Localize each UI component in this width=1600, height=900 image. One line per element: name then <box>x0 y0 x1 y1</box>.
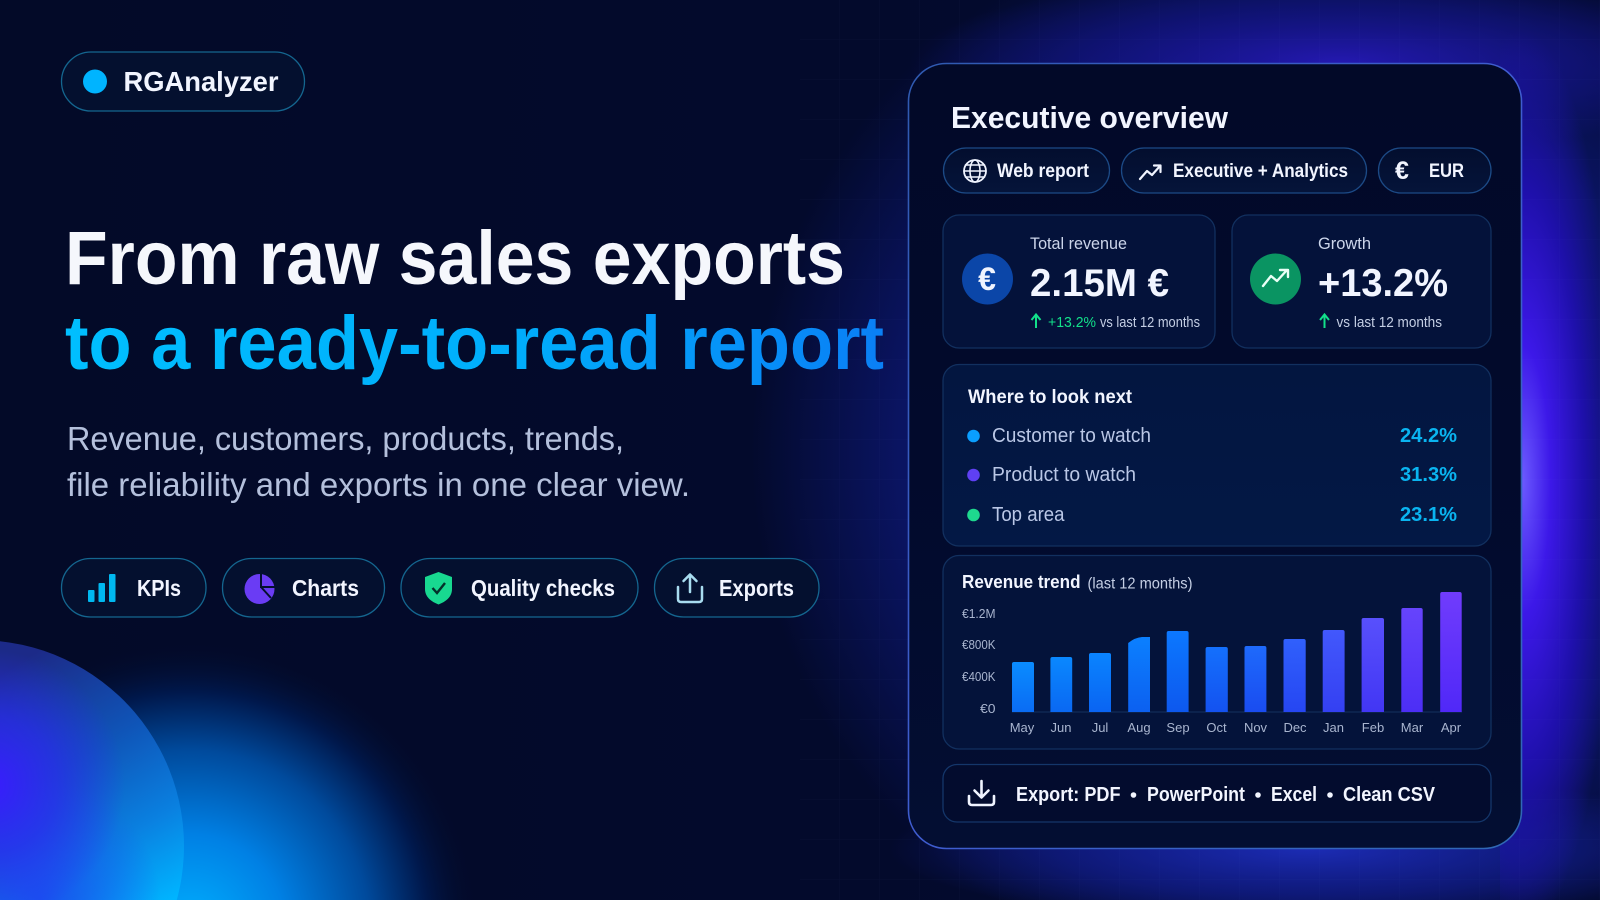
chart: month labels: Mar <box>1401 720 1424 735</box>
chart: y axis labels: €0 <box>980 701 996 716</box>
chart: month labels: Dec <box>1283 720 1307 735</box>
headline: From raw sales exports <box>65 216 845 301</box>
headline <box>65 216 884 386</box>
chart: y axis labels <box>962 606 996 716</box>
row: top area: Top area <box>992 504 1065 526</box>
panel title: Executive overview <box>951 100 1229 135</box>
chart: y axis labels: €1.2M <box>962 606 996 621</box>
chip: Web report: Web report <box>997 160 1089 182</box>
icon: euro <box>962 254 1013 304</box>
bar: export formats <box>943 764 1491 822</box>
bar: export formats: Clean CSV <box>1343 784 1436 806</box>
card: growth: Growth <box>1318 235 1371 253</box>
chip: KPIs <box>62 558 206 617</box>
chip: Executive + Analytics <box>1122 148 1366 193</box>
icon: download <box>969 781 994 805</box>
card: total revenue: vs last 12 months <box>1100 315 1200 331</box>
chip: EUR: € <box>1395 157 1409 185</box>
card: total revenue: Total revenue <box>1030 235 1127 253</box>
row: customer to watch: 24.2% <box>1400 425 1457 447</box>
chart: y axis labels: €800K <box>962 637 996 652</box>
headline: to a ready-to-read report <box>65 301 884 386</box>
bar: export formats: Export: PDF <box>1016 784 1120 806</box>
chart: month labels: Oct <box>1206 720 1227 735</box>
icon: growth arrow <box>1250 254 1301 304</box>
card: growth: vs last 12 months <box>1336 315 1442 331</box>
subheading: Revenue, customers, products, trends, <box>67 420 624 457</box>
chart: month labels: Jul <box>1092 720 1108 735</box>
chart: y axis labels: €400K <box>962 669 996 684</box>
chip: Web report <box>944 148 1110 193</box>
chip: EUR <box>1378 148 1491 193</box>
brand pill <box>62 52 304 111</box>
card: revenue trend <box>943 556 1491 749</box>
bar: export formats: PowerPoint <box>1147 784 1245 806</box>
row: product to watch <box>967 464 1457 486</box>
chip: Exports <box>654 558 819 617</box>
subheading: file reliability and exports in one clear view. <box>67 466 690 503</box>
chip: Charts <box>222 558 384 617</box>
chart: month labels: Apr <box>1441 720 1462 735</box>
chart: monthly bars <box>1012 592 1462 712</box>
chip: EUR: EUR <box>1429 160 1464 182</box>
chart: month labels: Jun <box>1051 720 1071 735</box>
chip: Quality checks: Quality checks <box>471 575 615 601</box>
decorative corner orb <box>0 640 480 900</box>
card: total revenue <box>943 215 1215 348</box>
card: revenue trend: (last 12 months) <box>1088 576 1192 592</box>
chip: Charts: Charts <box>292 575 359 601</box>
icon: euro: € <box>978 261 996 297</box>
chip: Quality checks <box>401 558 638 617</box>
chip: KPIs: KPIs <box>137 575 181 601</box>
card: growth <box>1232 215 1491 348</box>
background glow behind panel <box>740 0 1600 900</box>
chip: Executive + Analytics: Executive + Analytics <box>1173 160 1348 182</box>
feature chips <box>62 558 819 617</box>
panel: executive overview <box>908 64 1522 848</box>
row: product to watch: 31.3% <box>1400 464 1457 486</box>
row: top area <box>967 504 1457 526</box>
row: customer to watch: Customer to watch <box>992 425 1151 447</box>
card: growth: +13.2% <box>1318 262 1448 305</box>
chart: month labels: Sep <box>1166 720 1190 735</box>
card: revenue trend: Revenue trend <box>962 571 1080 592</box>
chart: month labels: Nov <box>1244 720 1268 735</box>
card: total revenue: 2.15M € <box>1030 262 1169 305</box>
chip: Exports: Exports <box>719 575 794 601</box>
card: where to look next <box>943 364 1491 546</box>
chart: month labels: Jan <box>1323 720 1344 735</box>
chart: month labels: Feb <box>1362 720 1384 735</box>
row: product to watch: Product to watch <box>992 464 1136 486</box>
subheading <box>67 420 690 503</box>
chart: month labels: May <box>1010 720 1035 735</box>
card: where to look next: Where to look next <box>968 387 1133 408</box>
bar: export formats: Excel <box>1271 784 1317 806</box>
brand pill: RGAnalyzer <box>124 66 279 97</box>
chart: month labels <box>1010 720 1462 735</box>
card: total revenue: +13.2% <box>1048 315 1096 331</box>
chart: month labels: Aug <box>1127 720 1151 735</box>
row: customer to watch <box>967 425 1457 447</box>
row: top area: 23.1% <box>1400 504 1457 526</box>
